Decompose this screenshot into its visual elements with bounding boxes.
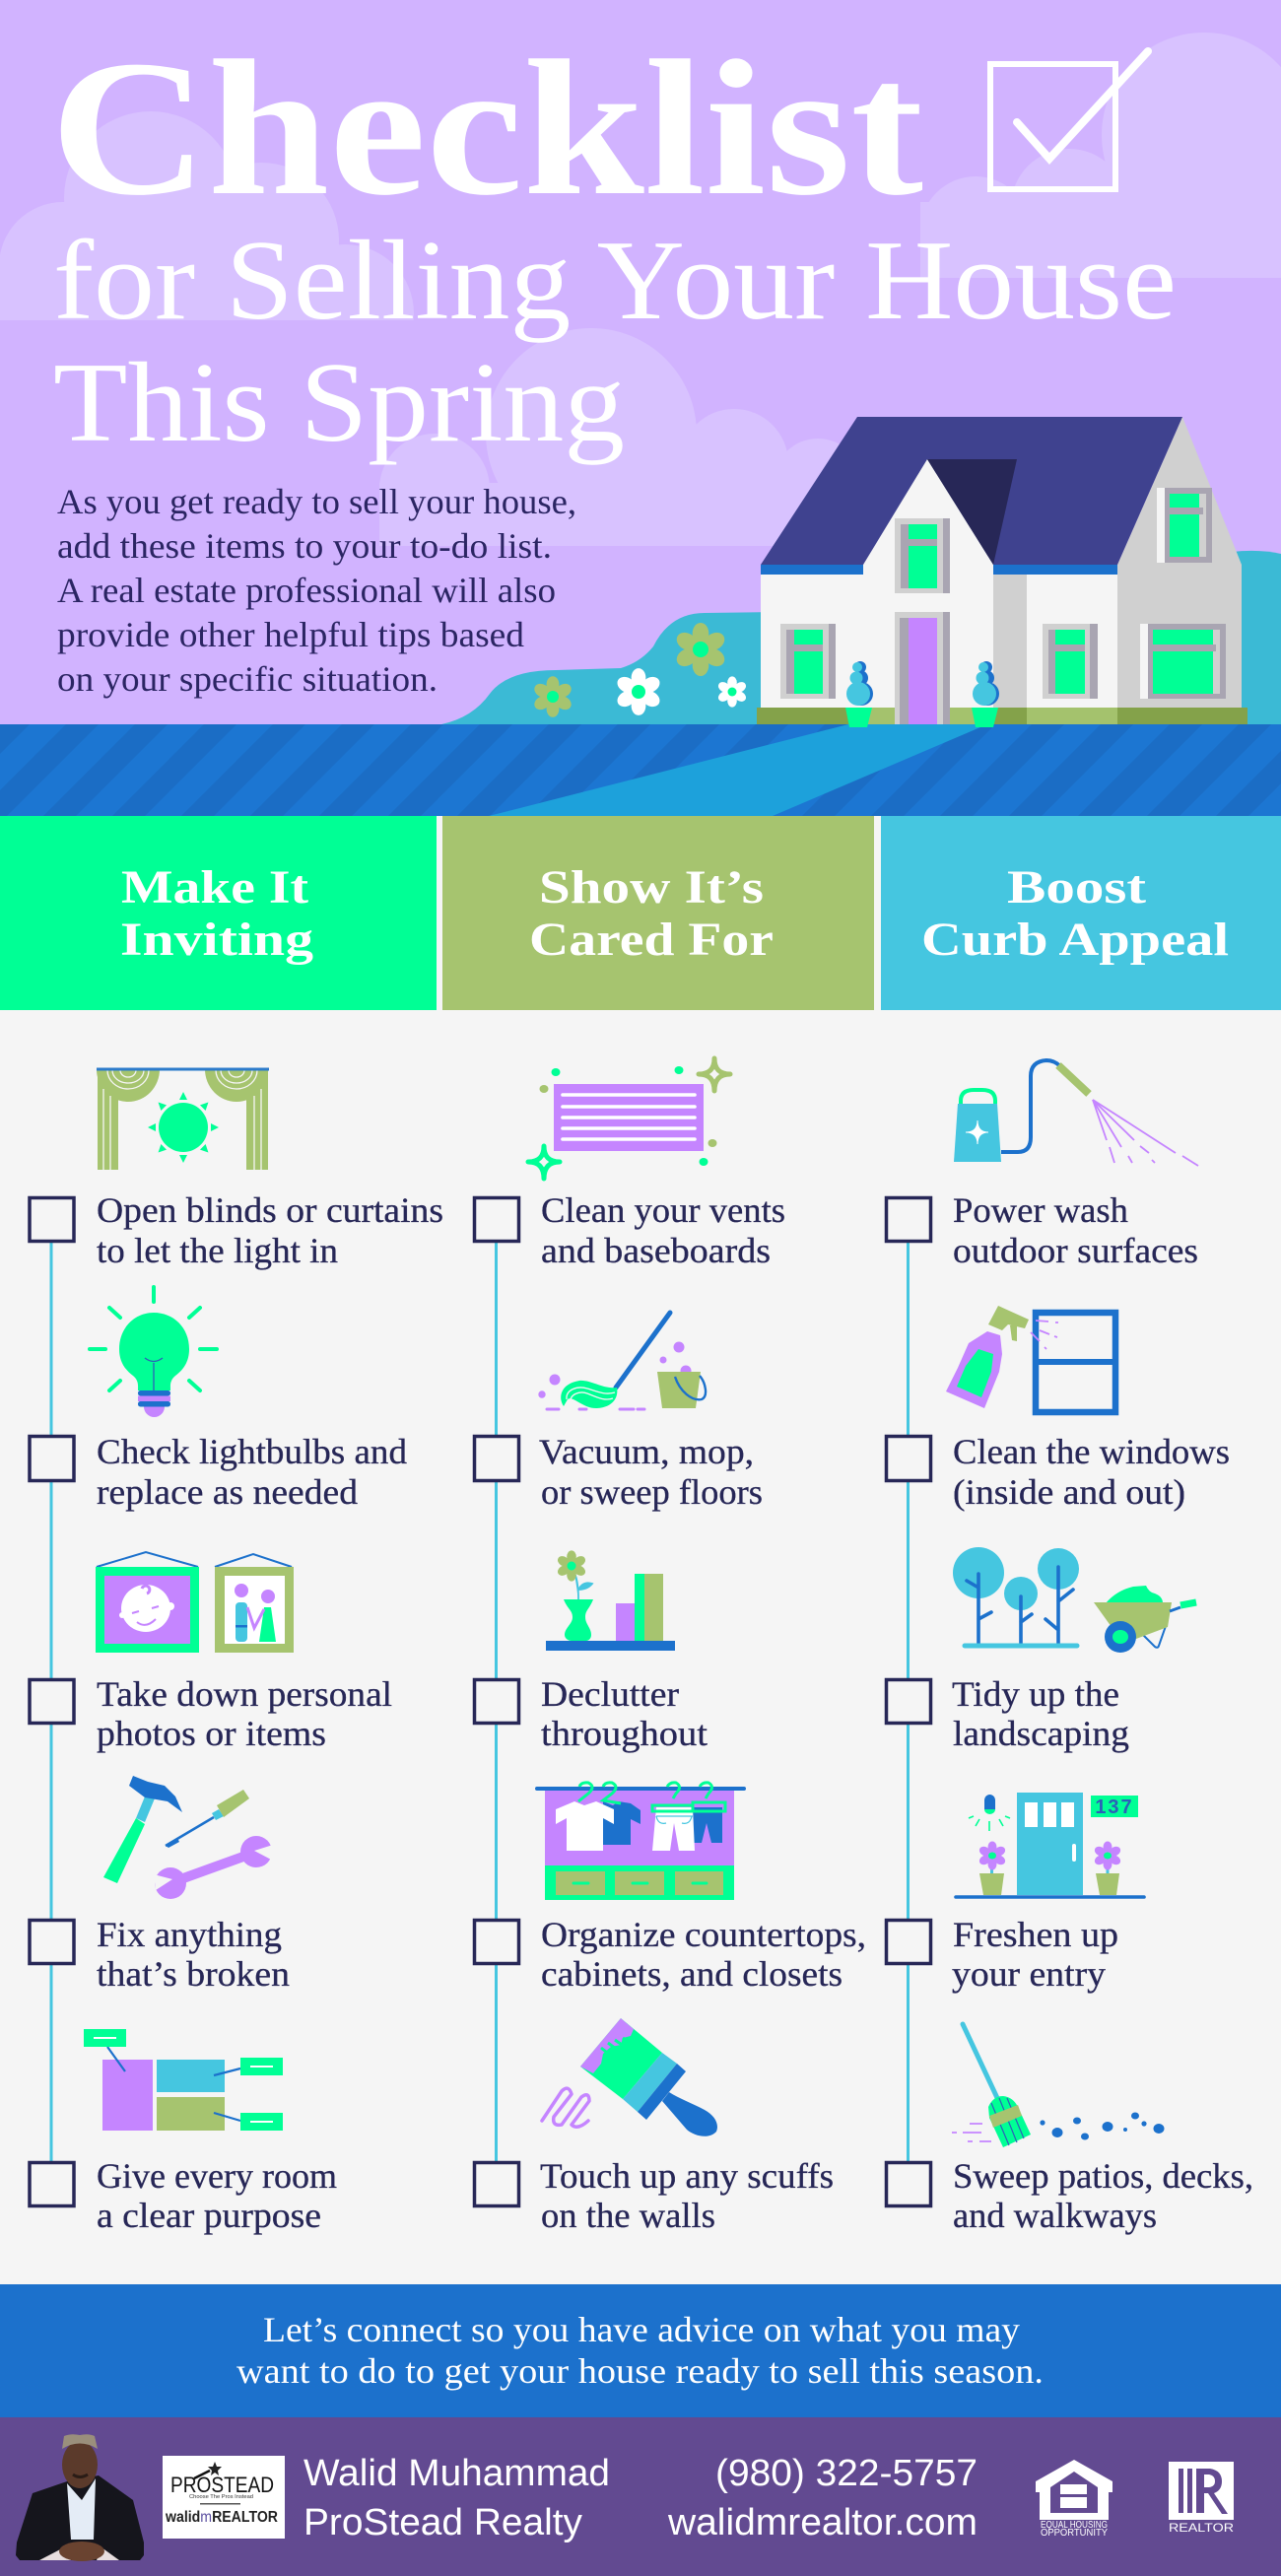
window: upper right [1157,488,1212,563]
logo: ProStead walidmREALTOR: Choose The Pros Instead [189,2494,253,2500]
icon: spray bottle and window [946,1306,1118,1412]
text block: intro paragraph: A real estate professional will also [57,571,556,610]
text: column 3 items: (inside and out) [953,1472,1185,1512]
icon: trees and wheelbarrow [953,1547,1196,1653]
icon: right topiary [972,661,999,727]
logo: ProStead walidmREALTOR: PROSTEAD [170,2473,274,2497]
text: column 2 items: cabinets, and closets [541,1954,843,1994]
text: column 1 items: Check lightbulbs and [97,1432,407,1471]
icon: decluttered shelf [546,1550,675,1651]
column line 2 [495,1243,498,2161]
text: column 2 items [539,1190,866,2235]
text block: intro paragraph: provide other helpful tips based [57,615,524,654]
text: column 3 items: outdoor surfaces [953,1231,1198,1270]
icon: tools [103,1776,273,1899]
icon: curtains and sun [97,1068,269,1170]
icon: equal housing opportunity: EQUAL HOUSING [1041,2520,1108,2531]
text: column 3 items: Tidy up the [952,1674,1119,1714]
panel: call to action band [0,2284,1281,2417]
icon: hill flowers [532,623,748,717]
icon: mop and bucket [538,1313,706,1409]
panel: column header make it inviting: Make It [121,861,308,914]
text: column 3 items: landscaping [953,1714,1129,1753]
text: column 3 items [952,1190,1253,2235]
text: column 1 items: replace as needed [97,1472,358,1512]
text: column 1 items: photos or items [97,1714,326,1753]
icon: lightbulb [90,1287,217,1417]
contact details [667,2453,978,2543]
icon: title check box [990,51,1148,189]
icon: organized closet [535,1783,746,1900]
text: column 3 items: Freshen up [953,1915,1118,1954]
text block: intro paragraph: on your specific situation. [57,659,438,699]
title: Checklist: Checklist [50,20,923,236]
icon: house [757,417,1247,727]
text: column 1 items: Open blinds or curtains [97,1190,443,1230]
panel: column header make it inviting: Inviting [120,914,313,966]
text: column 3 items: Sweep patios, decks, [953,2156,1253,2196]
text: column 2 items: Organize countertops, [541,1915,866,1954]
window: lower right [1140,624,1226,699]
agent portrait [16,2434,144,2561]
agent name [303,2453,610,2543]
text: column 1 items: Take down personal [97,1674,392,1714]
text: column 3 items: your entry [952,1954,1106,1994]
text block: intro paragraph: As you get ready to sell your house, [57,482,576,521]
panel: call to action band: want to do to get your house ready to sell this season. [236,2351,1044,2391]
panel: column header show it's cared for: Show It’s [539,861,764,914]
text: column 1 items: a clear purpose [97,2196,321,2235]
title: This Spring: This Spring [53,340,625,465]
icon: front entry [956,1793,1144,1897]
contact details: (980) 322-5757 [715,2453,978,2494]
icon: vent with sparkles [528,1058,730,1179]
text: column 2 items: Touch up any scuffs [540,2156,834,2196]
house number: 137 [1095,1796,1134,1818]
text: column 3 items: Clean the windows [953,1432,1230,1471]
window: lower left [780,624,836,699]
logo: ProStead walidmREALTOR: walidmREALTOR [165,2509,278,2526]
icon: equal housing opportunity: OPPORTUNITY [1041,2528,1108,2539]
icon: broom and dust [952,2024,1165,2147]
column line 1 [49,1243,53,2161]
icon: realtor mark [1169,2462,1234,2535]
panel: footer [0,2417,1281,2576]
icon: family photos [96,1552,294,1653]
panel: column header show it's cared for: Cared For [529,914,774,966]
panel: call to action band: Let’s connect so you have advice on what you may [263,2310,1020,2349]
icon: equal housing opportunity [1036,2460,1112,2539]
agent name: ProStead Realty [303,2502,582,2543]
text: column 3 items: and walkways [953,2196,1157,2235]
panel: ground and walkway [0,724,1281,816]
text: column 2 items: and baseboards [541,1231,771,1270]
logo: ProStead walidmREALTOR [163,2456,285,2539]
text: column 2 items: Clean your vents [541,1190,785,1230]
panel: column header boost curb appeal: Boost [1007,861,1146,914]
panel: column header make it inviting [0,816,437,1010]
icon: paint brush [542,2018,717,2136]
panel: column header show it's cared for [442,816,874,1010]
text: column 2 items: throughout [541,1714,708,1753]
panel: hero header [0,0,1281,724]
icon: power washer [954,1060,1198,1166]
panel: checklist background [0,1010,1281,2284]
window: lower middle [1043,624,1098,699]
agent name: Walid Muhammad [303,2453,610,2494]
text: column 1 items: Give every room [97,2156,337,2196]
text: column 2 items: or sweep floors [541,1472,763,1512]
panel: column header boost curb appeal [881,816,1281,1010]
text block: intro paragraph: add these items to your to-do list. [57,526,552,566]
text: column 3 items: Power wash [953,1190,1128,1230]
text: column 2 items: Declutter [541,1674,679,1714]
text: column 1 items [97,1190,443,2235]
door [895,612,950,724]
text: column 2 items: on the walls [541,2196,715,2235]
contact details: walidmrealtor.com [667,2502,978,2543]
window: gable [895,518,950,593]
text: column 1 items: Fix anything [97,1915,282,1954]
panel: column header boost curb appeal: Curb Appeal [921,914,1229,966]
text: column 2 items: Vacuum, mop, [539,1432,754,1471]
title: for Selling Your House: for Selling Your House [53,218,1177,343]
column line 3 [907,1243,910,2161]
icon: room layout [84,2029,283,2131]
text: column 1 items: to let the light in [97,1231,338,1270]
icon: realtor mark: REALTOR [1169,2521,1234,2535]
icon: left topiary [845,661,873,727]
text: column 1 items: that’s broken [97,1954,290,1994]
checkboxes [30,1198,930,2205]
text block: intro paragraph [57,482,576,699]
